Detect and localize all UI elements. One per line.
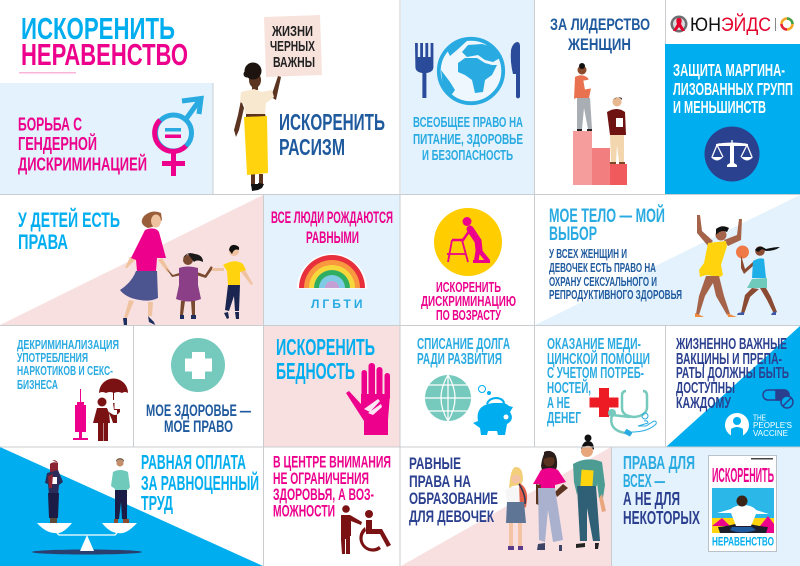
report cover [708,455,777,552]
panel: rights for all: А НЕ ДЛЯ [623,488,680,509]
panel: end poverty [264,326,400,447]
title: ИСКОРЕНИТЬ [21,11,175,46]
panel: my body my choice: МОЕ ТЕЛО — МОЙ [549,205,665,227]
panel: debt cancellation: РАДИ РАЗВИТИЯ [417,351,502,368]
panel: my health my right [146,338,251,436]
icon: fork [415,43,433,98]
panel: LGBTI: ЛГБТИ [311,297,366,311]
panel: disability: НЕ ОГРАНИЧЕНИЯ [273,470,369,488]
panel: needs-based health care: ОКАЗАНИЕ МЕДИ- [547,336,641,353]
icon: rainbow [297,254,367,288]
panel: decriminalisation: ДЕКРИМИНАЛИЗАЦИЯ [17,338,119,352]
panel: equal pay: РАВНАЯ ОПЛАТА [141,452,246,474]
panel: debt cancellation [417,336,513,435]
panel: end racism: РАСИЗМ [279,134,345,160]
illustration: woman and children [120,212,253,326]
panel: girls' education: ПРАВА НА [409,472,471,491]
panel: children's rights: У ДЕТЕЙ ЕСТЬ [18,208,120,232]
panel: girls' education: ОБРАЗОВАНИЕ [409,489,498,508]
panel: LGBTI [264,195,400,325]
illustration: man on low step [607,97,626,164]
panel: LGBTI: ВСЕ ЛЮДИ РОЖДАЮТСЯ [271,209,393,227]
panel: decriminalisation: НАРКОТИКОВ И СЕКС- [17,364,113,378]
panel: equal pay: ТРУД [141,493,173,515]
panel: my body my choice: У ВСЕХ ЖЕНЩИН И [549,247,627,261]
panel: debt cancellation: СПИСАНИЕ ДОЛГА [417,336,510,353]
panel: children's rights: ПРАВА [18,231,68,254]
panel: my body my choice: ОХРАНУ СЕКСУАЛЬНОГО И [549,275,657,289]
icon: teal globe [425,375,471,421]
panel: gender discrimination [0,83,213,194]
panel: rights for all: НЕКОТОРЫХ [623,507,700,528]
panel: needs-based health care: НОСТЕЙ, [547,378,591,397]
panel: food, health, security [401,0,535,194]
panel: my body my choice: ВЫБОР [549,224,597,245]
panel: needs-based health care: А НЕ [547,395,570,412]
panel: gender discrimination: ДИСКРИМИНАЦИЕЙ [18,154,147,174]
panel: girls' education [401,434,611,566]
panel: end poverty: БЕДНОСТЬ [276,358,355,384]
panel: LGBTI: РАВНЫМИ [306,229,359,247]
icon: scales of justice [704,126,760,182]
panel: needs-based health care: ДЕНЕГ [547,410,581,427]
panel: gender discrimination: БОРЬБА С [18,114,82,134]
placard: ВАЖНЫ [273,55,315,71]
panel: decriminalisation: БИЗНЕСА [17,378,58,392]
panel: food, health, security: И БЕЗОПАСНОСТЬ [422,148,513,164]
panel: end poverty: ИСКОРЕНИТЬ [276,334,375,360]
panel: gender discrimination: ГЕНДЕРНОЙ [18,133,97,154]
icon: helping hand [346,363,390,435]
icon: stethoscope and hand [608,391,656,437]
panel: decriminalisation [17,338,128,441]
logo: the people's vaccine [725,413,792,438]
panel: needs-based health care [547,336,656,437]
panel: girls' education: ДЛЯ ДЕВОЧЕК [409,507,494,526]
illustration: woman on scale [45,460,63,523]
panel: equal pay: ЗА РАВНОЦЕННЫЙ [141,471,259,495]
panel: disability: ЗДОРОВЬЯ, А ВОЗ- [273,486,374,504]
panel: rights for all [612,447,800,566]
placard: ЖИЗНИ [271,24,313,40]
panel: marginalised groups [665,44,800,194]
panel: end racism [234,15,385,191]
logo: the people's vaccine: THE [753,414,766,422]
icon: globe [439,39,503,103]
panel: age discrimination [421,208,516,324]
panel: age discrimination: ПО ВОЗРАСТУ [436,308,502,324]
panel: food, health, security: ПИТАНИЕ, ЗДОРОВЬЕ [413,132,523,148]
panel: women's leadership: ЖЕНЩИН [567,35,631,54]
icon: gender symbol [155,98,201,176]
panel: decriminalisation: УПОТРЕБЛЕНИЯ [17,351,88,365]
panel: age discrimination: ДИСКРИМИНАЦИЮ [421,294,516,310]
panel: food, health, security: ВСЕОБЩЕЕ ПРАВО НА [413,115,523,131]
placard: ЧЕРНЫХ [270,39,315,55]
panel: age discrimination: ИСКОРЕНИТЬ [436,280,501,296]
panel: rights for all: ПРАВА ДЛЯ [623,452,695,473]
illustration: man on scale [111,458,130,523]
illustration: balance scale [32,523,142,554]
title: НЕРАВЕНСТВО [21,37,188,72]
logo: the people's vaccine: VACCINE [753,429,788,438]
panel: needs-based health care: С УЧЕТОМ ПОТРЕБ- [547,365,644,382]
panel: my body my choice: ДЕВОЧЕК ЕСТЬ ПРАВО НА [549,261,656,275]
panel: girls' education: РАВНЫЕ [409,454,461,473]
panel: vaccines [666,326,800,447]
logo: UNAIDS: ЮН [690,14,721,36]
panel: disability [273,454,391,554]
panel: my health my right: МОЕ ПРАВО [164,417,233,436]
panel: vaccines: ДОСТУПНЫ [676,380,735,397]
title [19,11,188,74]
illustration: woman with placard [234,62,281,191]
panel: end racism: ИСКОРЕНИТЬ [279,109,385,135]
icon: syringe [73,389,88,440]
panel: my body my choice: РЕПРОДУКТИВНОГО ЗДОРОВЬЯ [549,288,682,302]
panel: disability: МОЖНОСТИ [273,502,335,520]
panel: children's rights [0,195,263,326]
icon: red cross [590,388,618,417]
panel: women's leadership: ЗА ЛИДЕРСТВО [550,15,650,34]
panel: disability: В ЦЕНТРЕ ВНИМАНИЯ [273,454,391,472]
placard [264,15,322,77]
panel: my health my right: МОЕ ЗДОРОВЬЕ — [146,401,251,420]
illustration: woman and girl with ball [695,215,780,317]
icon: carer and wheelchair [341,505,391,554]
icon: knife [511,42,520,98]
panel: rights for all: ВСЕХ — [623,470,665,491]
logo: UNAIDS: ЭЙДС [721,12,771,36]
panel: my body my choice [535,195,800,325]
panel: vaccines: КАЖДОМУ [676,395,732,412]
icon: pill [763,390,793,408]
chart: steps [573,131,627,185]
icon: piggy bank [473,386,513,435]
icon: person with umbrella [93,378,128,441]
icon: plus in circle [171,338,225,392]
illustration: three girls [505,434,606,551]
panel: needs-based health care: ЦИНСКОЙ ПОМОЩИ [547,349,650,368]
panel: women's leadership [550,15,650,185]
panel: equal pay [0,447,263,566]
logo: the people's vaccine: PEOPLE'S [753,421,792,430]
illustration: woman on top step [574,63,592,131]
logo: UNAIDS [670,12,792,36]
icon: person with walker [434,208,502,276]
